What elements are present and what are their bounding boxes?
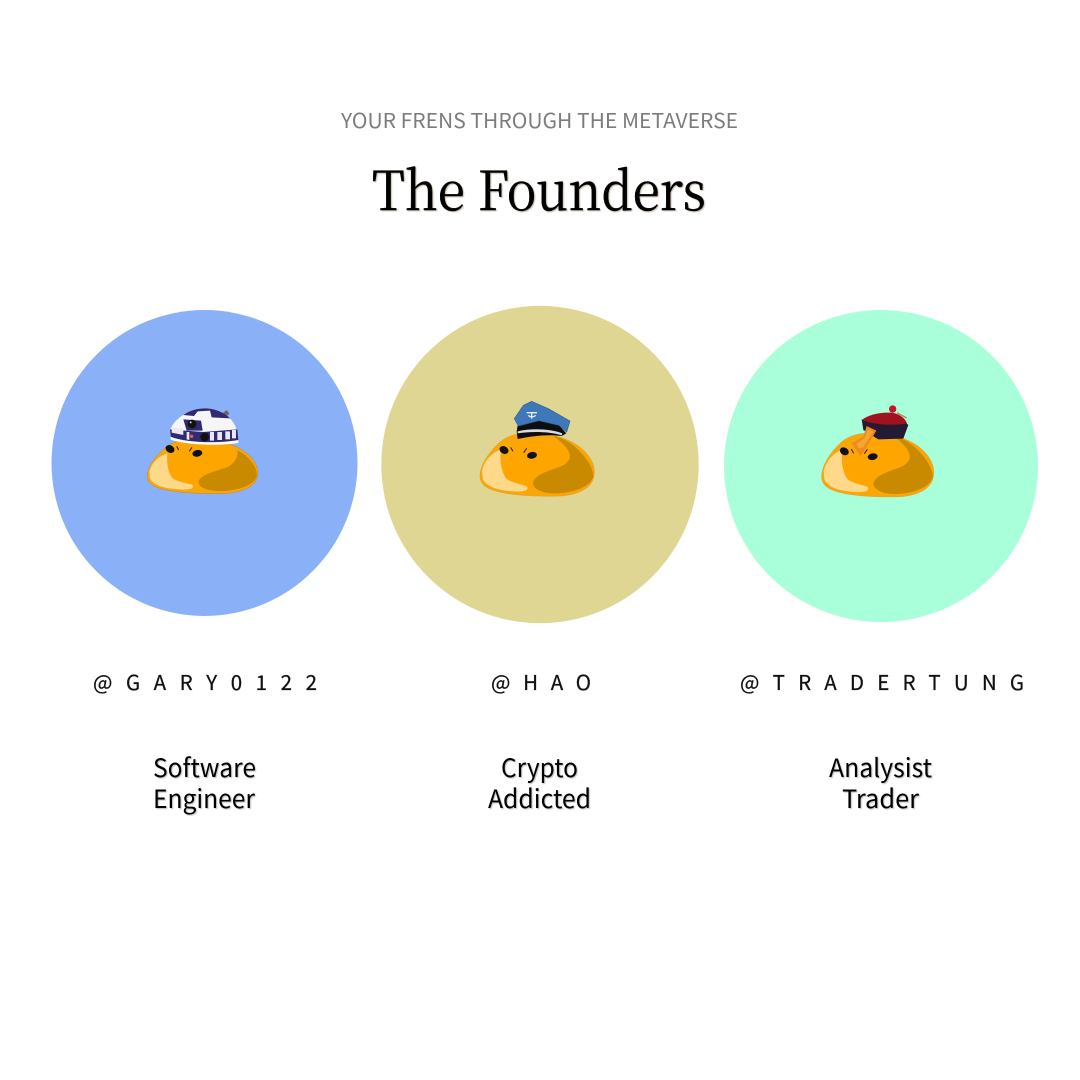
role: Crypto: [501, 748, 578, 785]
handle: @TRADERTUNG: [740, 666, 1024, 696]
role: Analysist: [829, 748, 932, 785]
eyebrow subtitle: YOUR FRENS THROUGH THE METAVERSE: [340, 104, 738, 134]
handle: @HAO: [491, 666, 591, 696]
khaki circle: [381, 306, 699, 623]
role: Trader: [842, 779, 919, 816]
panel: founder TraderTung: [724, 310, 1038, 816]
role: Software: [153, 748, 256, 785]
icon: blob with officer cap: [480, 401, 594, 496]
role: Engineer: [153, 779, 255, 816]
panel: founder Gary0122: [52, 310, 358, 816]
handle: @GARY0122: [93, 666, 317, 696]
mint circle: [724, 310, 1038, 622]
role: [488, 748, 591, 816]
icon: blob with R2-D2 dome hat: [147, 408, 258, 494]
blue circle: [52, 310, 358, 616]
title: The Founders: [372, 149, 706, 226]
role: Addicted: [488, 779, 591, 816]
role: [829, 748, 932, 816]
role: [153, 748, 256, 816]
panel: founder Hao: [381, 306, 699, 816]
icon: blob with Qing official hat: [822, 405, 934, 497]
